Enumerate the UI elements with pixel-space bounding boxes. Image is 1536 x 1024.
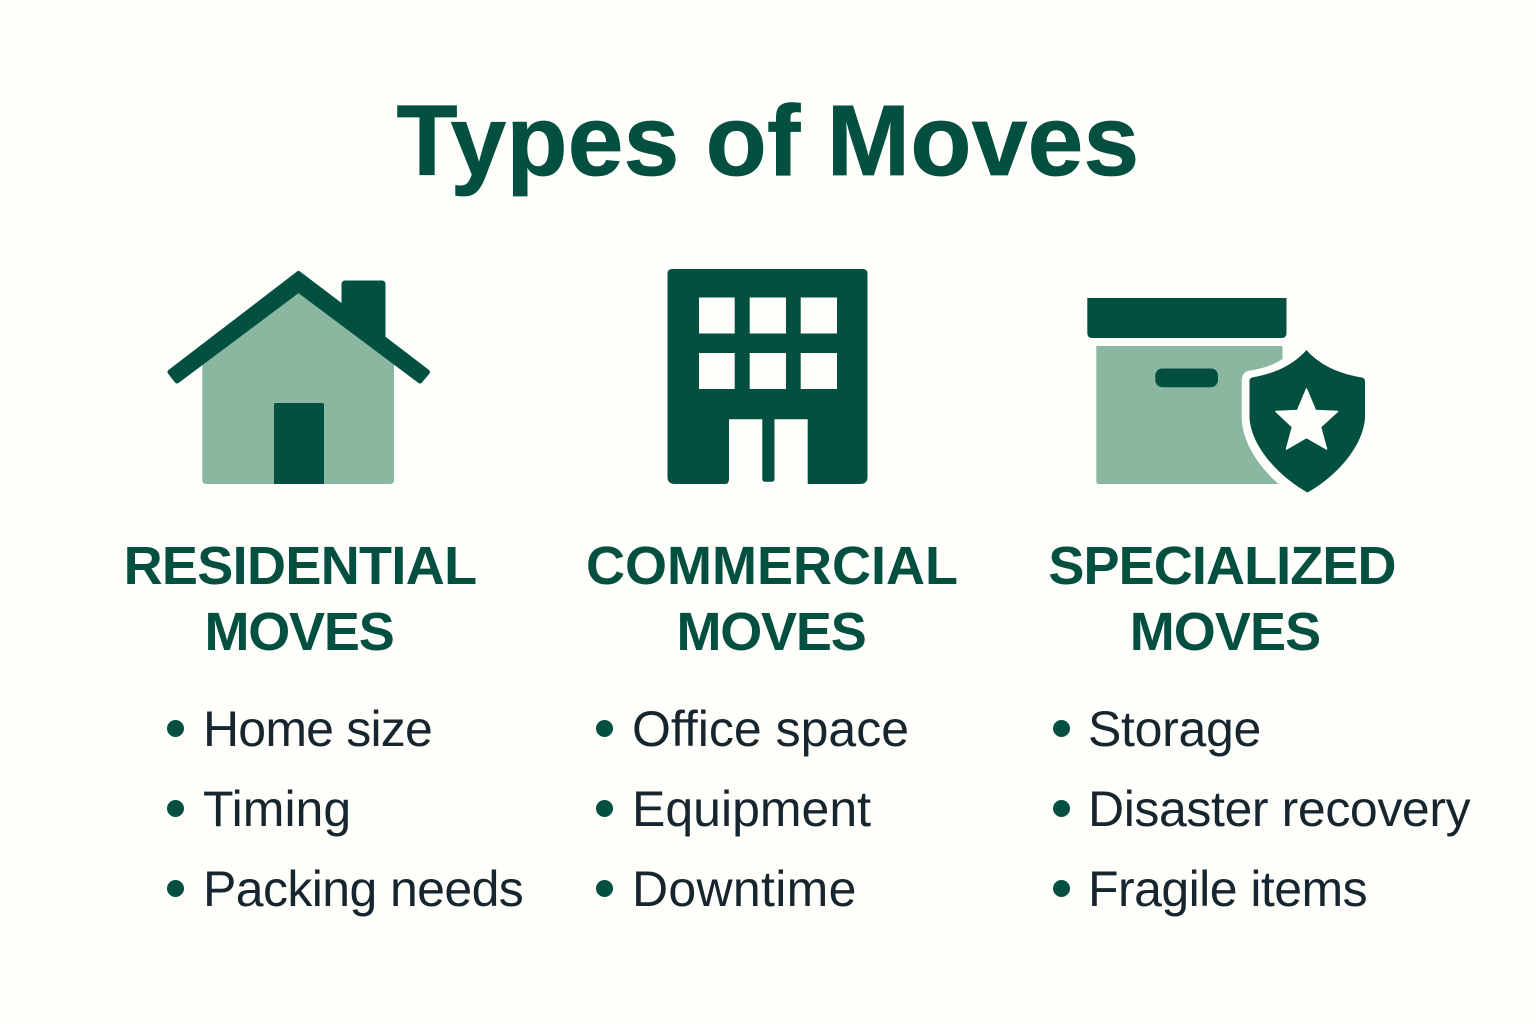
list: commercial: Office space bbox=[632, 701, 909, 757]
icon: office building bbox=[668, 269, 868, 484]
heading: residential moves: MOVES bbox=[204, 602, 394, 662]
heading: residential moves: RESIDENTIAL bbox=[124, 536, 476, 596]
list: residential: Home size bbox=[203, 701, 432, 757]
list: residential: Packing needs bbox=[203, 861, 523, 917]
heading: residential moves bbox=[124, 536, 476, 662]
list: commercial bbox=[596, 701, 909, 917]
list: specialized: Disaster recovery bbox=[1088, 781, 1470, 837]
box body bbox=[1096, 346, 1282, 484]
roof and chimney bbox=[170, 274, 428, 381]
list: residential: Timing bbox=[203, 781, 351, 837]
icon: box with shield bbox=[1087, 298, 1365, 492]
icon: house bbox=[168, 270, 430, 484]
list: specialized bbox=[1053, 701, 1470, 917]
list: specialized: Fragile items bbox=[1088, 861, 1367, 917]
box lid bbox=[1087, 298, 1286, 338]
heading: commercial moves bbox=[586, 536, 958, 662]
heading: commercial moves: MOVES bbox=[676, 602, 866, 662]
door post bbox=[762, 419, 774, 482]
shield bbox=[1250, 350, 1365, 492]
list: specialized: Storage bbox=[1088, 701, 1261, 757]
heading: specialized moves bbox=[1048, 536, 1396, 662]
box handle bbox=[1155, 368, 1218, 387]
heading: specialized moves: SPECIALIZED bbox=[1048, 536, 1396, 596]
list: commercial: Equipment bbox=[632, 781, 871, 837]
list: residential bbox=[167, 701, 523, 917]
door bbox=[274, 403, 324, 484]
title: Types of Moves bbox=[396, 85, 1139, 197]
star bbox=[1276, 389, 1338, 449]
heading: commercial moves: COMMERCIAL bbox=[586, 536, 958, 596]
house wall bbox=[202, 288, 394, 484]
building body bbox=[668, 269, 868, 484]
windows bbox=[699, 298, 837, 389]
heading: specialized moves: MOVES bbox=[1130, 602, 1320, 662]
list: commercial: Downtime bbox=[632, 861, 857, 917]
